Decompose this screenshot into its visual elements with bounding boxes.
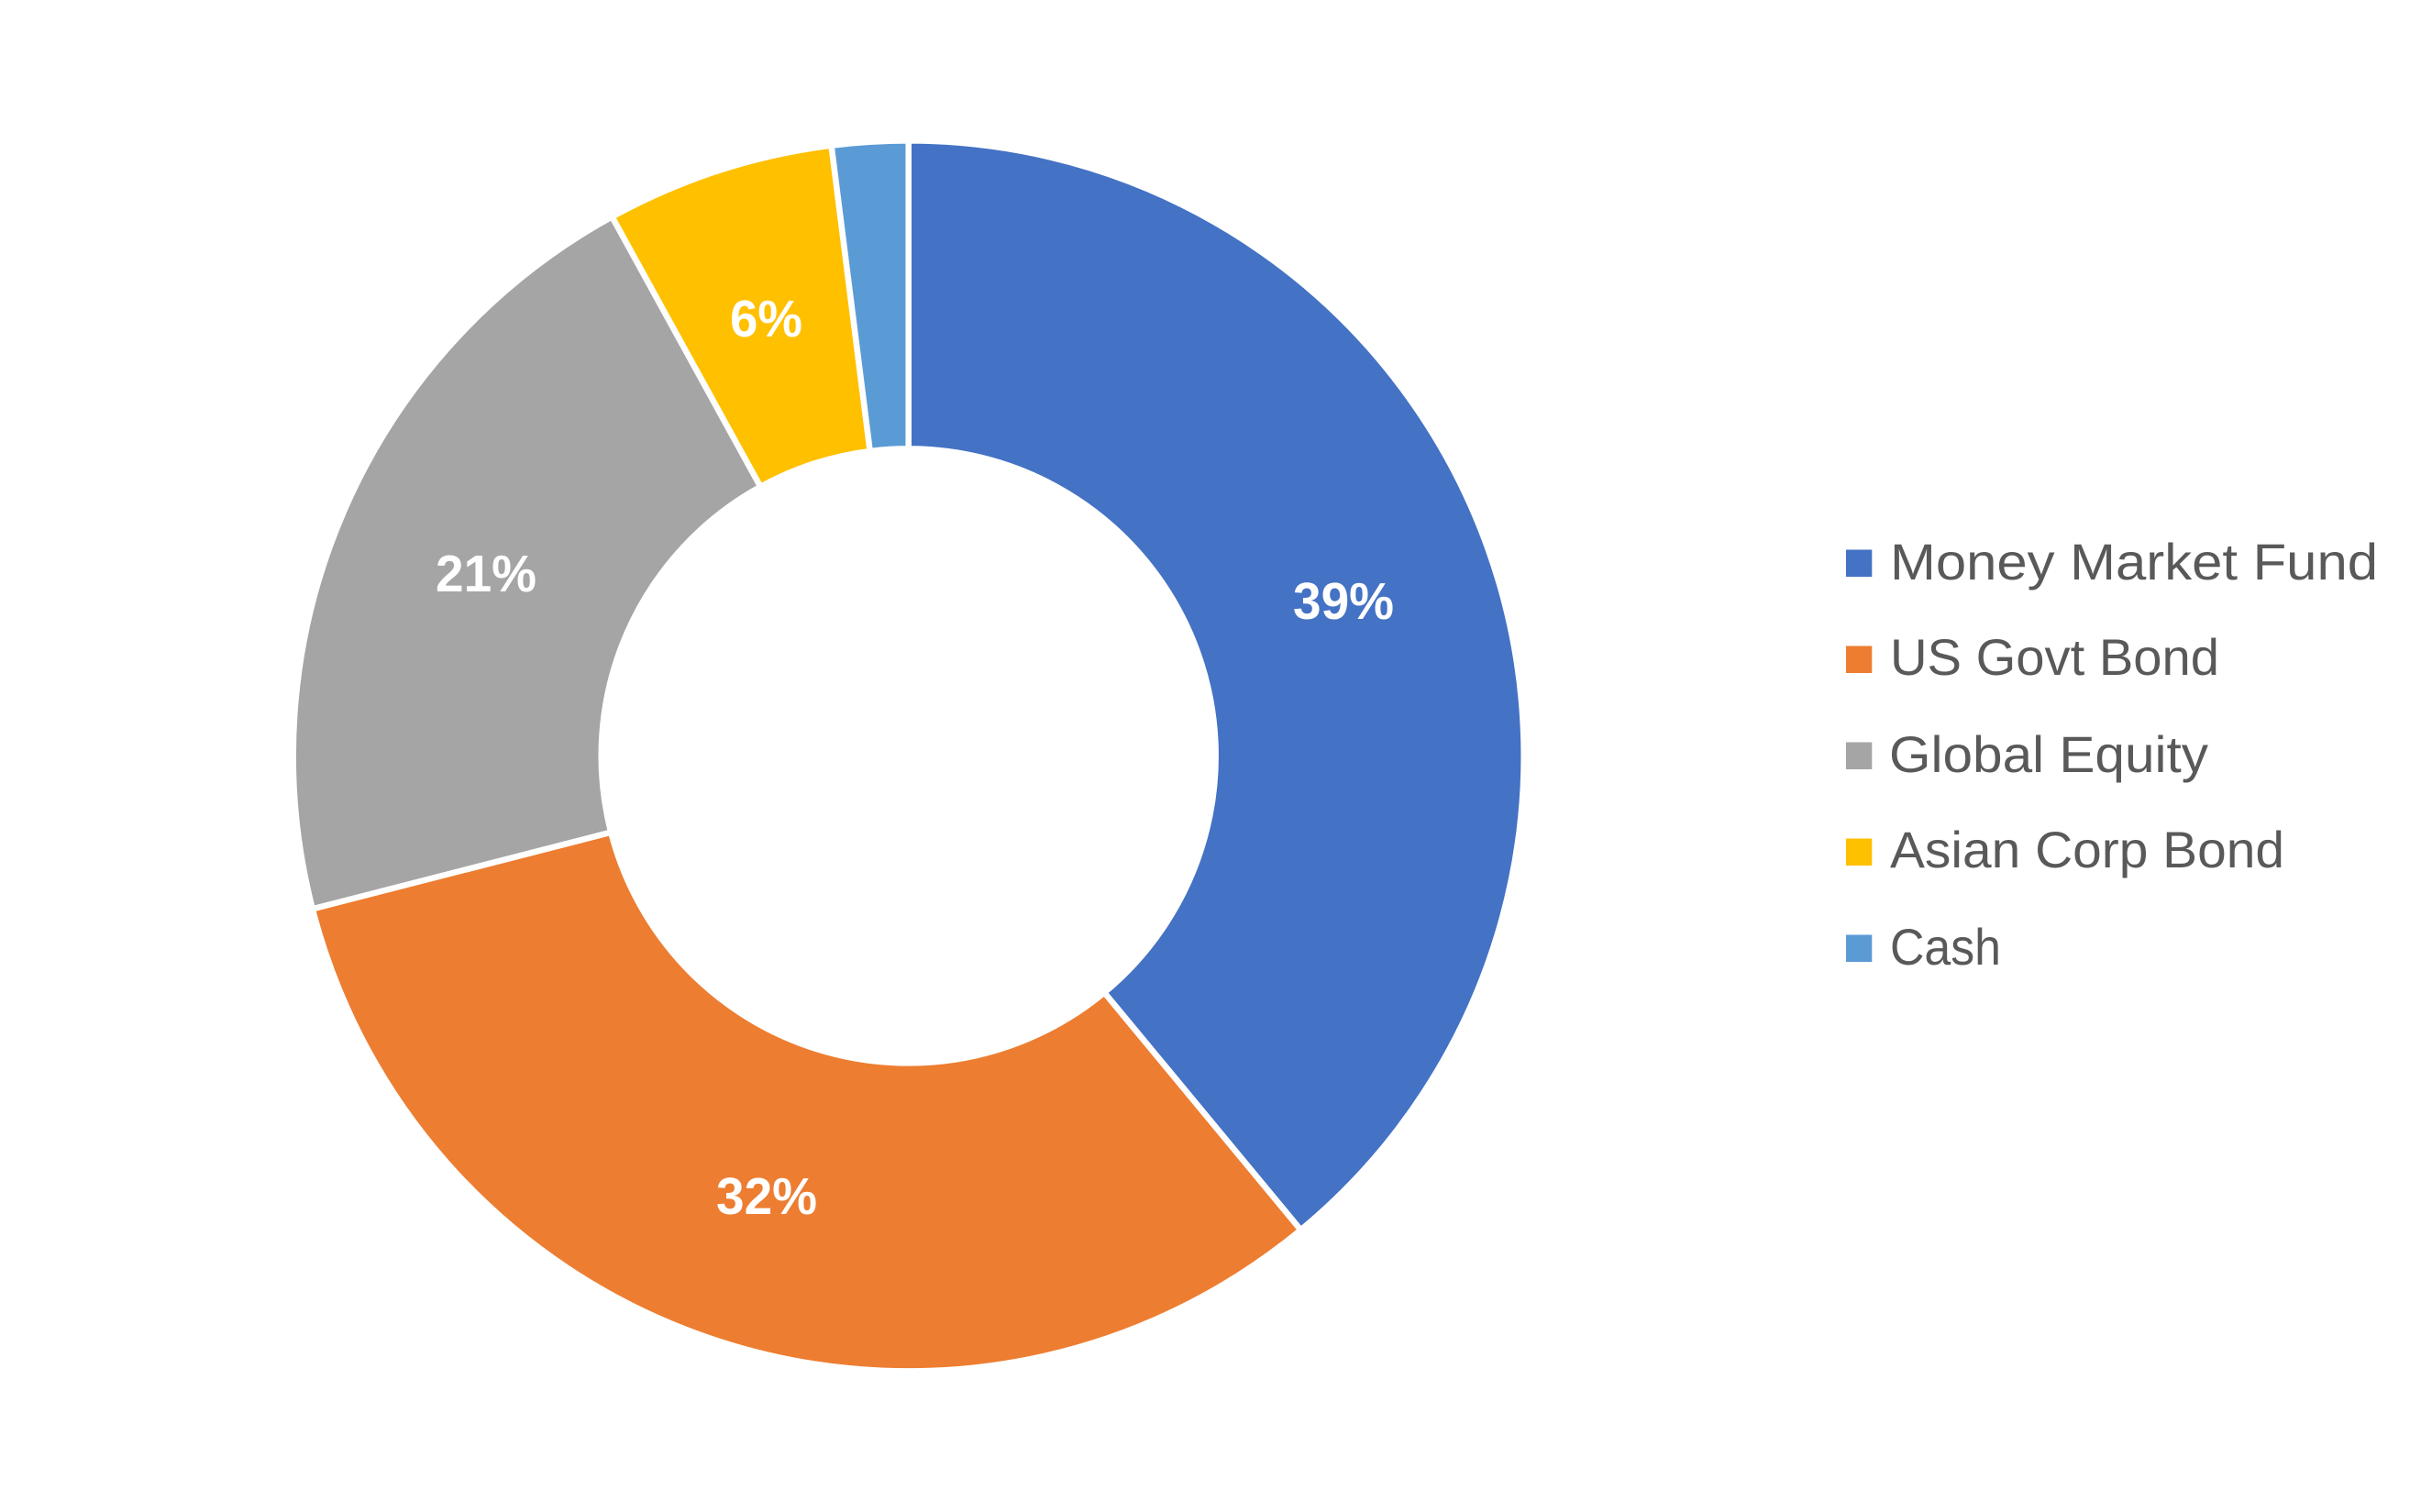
- legend item: Global Equity: Global Equity: [1889, 725, 2208, 783]
- slice: Asian Corp Bond 6%: [612, 146, 870, 487]
- slice: Money Market Fund 39%: [909, 140, 1524, 1230]
- slice: Cash 2%: [832, 140, 909, 451]
- data label: 6%: 6%: [730, 290, 802, 348]
- legend item: Asian Corp Bond: Asian Corp Bond: [1890, 821, 2284, 878]
- legend item: Cash: [1846, 918, 2001, 976]
- legend item: Cash: Cash: [1890, 918, 2001, 976]
- legend item: US Govt Bond: US Govt Bond: [1890, 628, 2219, 686]
- legend item: Money Market Fund: Money Market Fund: [1890, 533, 2378, 590]
- legend: [1846, 533, 2378, 976]
- slice: US Govt Bond 32%: [313, 833, 1300, 1371]
- donut chart: [293, 140, 1524, 1371]
- slice: Global Equity 21%: [293, 216, 760, 909]
- data label: 21%: 21%: [436, 545, 536, 603]
- data label: 39%: 39%: [1293, 572, 1394, 631]
- data label: 32%: 32%: [716, 1167, 817, 1226]
